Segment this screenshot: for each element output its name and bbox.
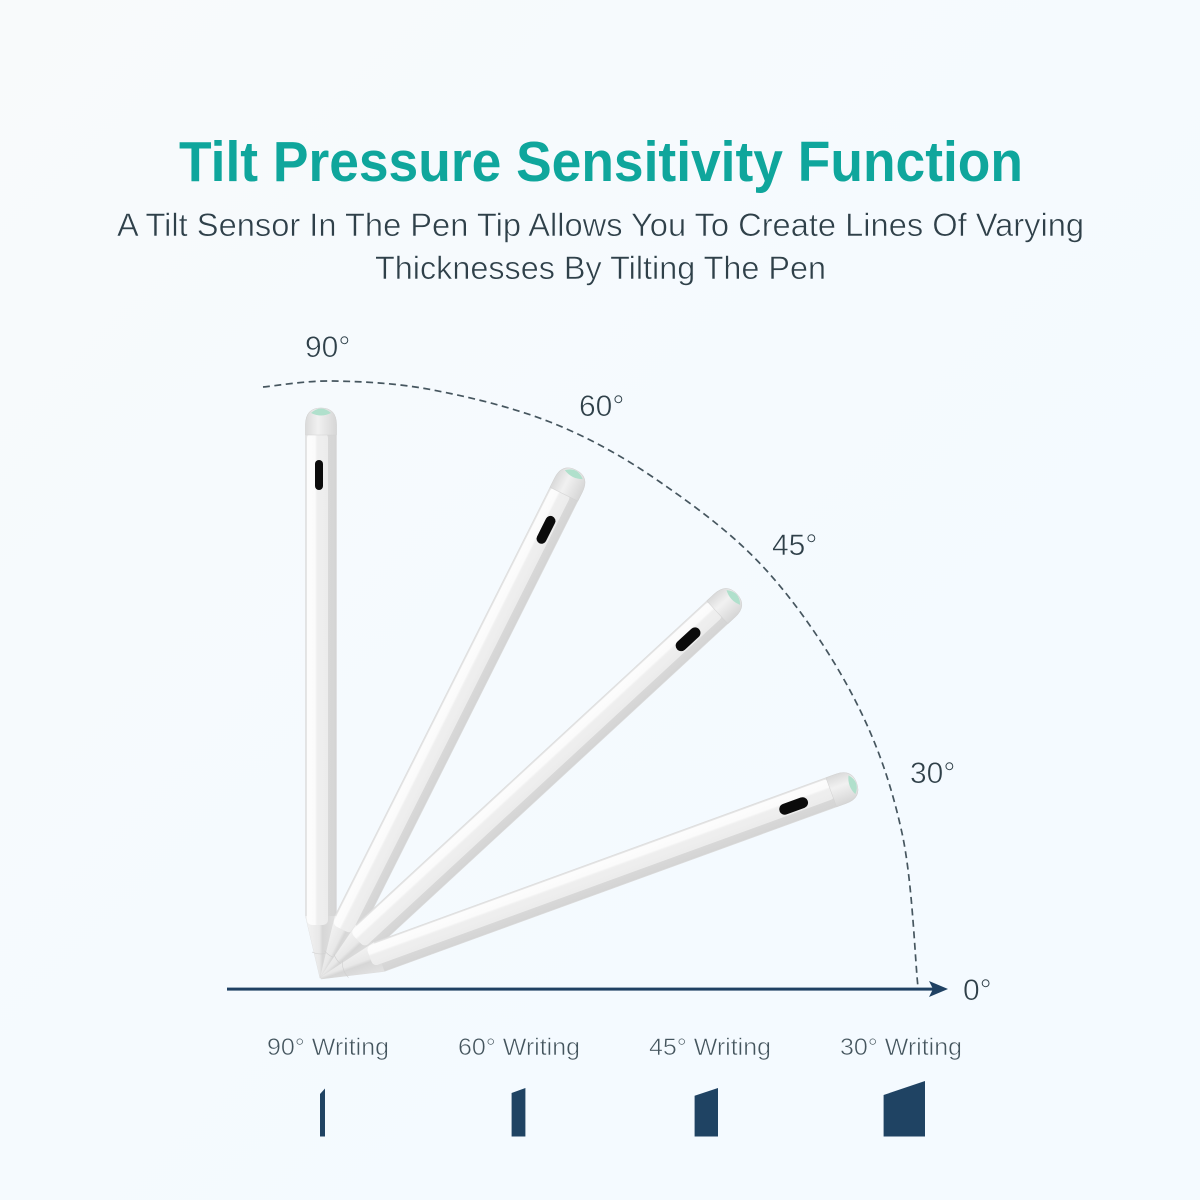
angle axis arrow <box>227 981 948 997</box>
pen at 60 degrees <box>307 463 590 985</box>
caption: 30 degree writing: 30° Writing <box>840 1034 962 1061</box>
angle label 60: 60° <box>579 390 624 423</box>
angle label 0: 0° <box>963 974 992 1007</box>
angle label 90: 90° <box>305 331 350 364</box>
angle label 30: 30° <box>910 757 955 790</box>
stroke sample: 45 degrees <box>695 1088 718 1136</box>
caption: 60 degree writing: 60° Writing <box>458 1034 580 1061</box>
pen at 30 degrees <box>316 768 862 993</box>
stroke sample: 60 degrees <box>512 1088 525 1136</box>
subtitle: A Tilt Sensor In The Pen Tip Allows You To Create Lines Of Varying <box>117 207 1084 243</box>
dashed angle arc <box>263 381 918 987</box>
angle label 45: 45° <box>772 529 817 562</box>
caption: 90 degree writing: 90° Writing <box>267 1034 389 1061</box>
subtitle: Thicknesses By Tilting The Pen <box>375 250 826 286</box>
pen at 90 degrees <box>306 408 336 978</box>
stroke sample: 30 degrees <box>884 1081 925 1136</box>
pen at 45 degrees <box>310 583 747 989</box>
subtitle <box>117 207 1084 286</box>
title: Tilt Pressure Sensitivity Function <box>179 130 1023 194</box>
stroke sample: 90 degrees <box>320 1088 325 1136</box>
caption: 45 degree writing: 45° Writing <box>649 1034 771 1061</box>
